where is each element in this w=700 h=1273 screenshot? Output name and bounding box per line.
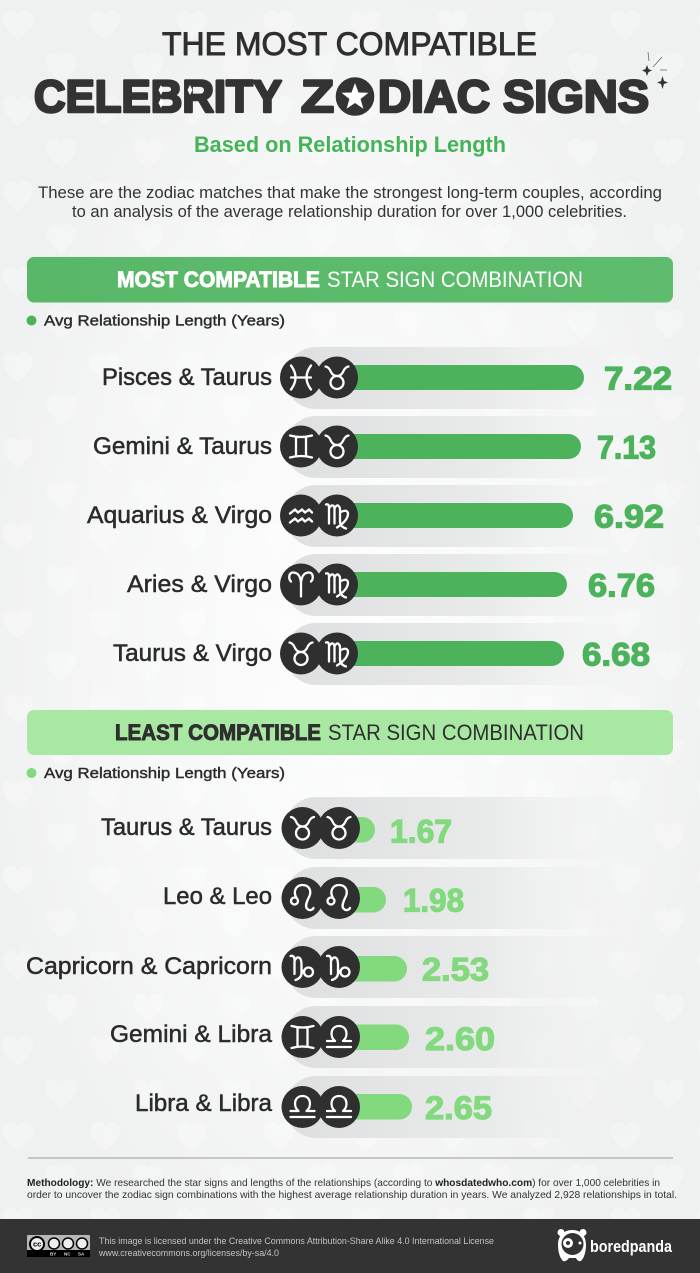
bar row: Gemini & Taurus 7.13: 7.13	[597, 430, 656, 466]
bar row: Aquarius & Virgo 6.92	[87, 485, 664, 547]
title: the most compatible: THE MOST COMPATIBLE	[162, 26, 537, 62]
intro text: These are the zodiac matches that make the strongest long-term couples, according	[38, 184, 662, 202]
bar row: Libra & Libra 2.65	[135, 1076, 650, 1138]
bar row: Taurus & Virgo 6.68: 6.68	[582, 636, 650, 672]
title: celebrity zodiac signs: DIAC	[378, 71, 490, 122]
bar row: Libra & Libra 2.65: 2.65	[425, 1090, 492, 1126]
bar row: Leo & Leo 1.98	[163, 867, 650, 929]
bar row: Aquarius & Virgo 6.92: Aquarius & Virgo	[87, 502, 272, 529]
bar row: Aries & Virgo 6.76: 6.76	[588, 568, 655, 604]
bar row: Gemini & Libra 2.60	[110, 1006, 650, 1068]
icon: sparkles	[642, 52, 668, 89]
license text: This image is licensed under the Creative Commons Attribution-Share Alike 4.0 International License	[99, 1236, 494, 1246]
license text: www.creativecommons.org/licenses/by-sa/4.0	[98, 1248, 279, 1258]
logo: bored panda: boredpanda	[590, 1237, 672, 1256]
panel: most compatible banner	[27, 257, 673, 302]
title: celebrity zodiac signs: CELEBRITY	[34, 71, 282, 122]
icon: creative commons badge: BY	[50, 1252, 56, 1256]
legend: least compatible: Avg Relationship Length (Years)	[44, 765, 285, 782]
icon: creative commons badge	[27, 1235, 90, 1257]
panel: least compatible banner: STAR SIGN COMBINATION	[328, 720, 584, 745]
subtitle: Based on Relationship Length	[194, 132, 506, 157]
bar row: Aries & Virgo 6.76	[127, 554, 655, 616]
legend: most compatible: Avg Relationship Length (Years)	[44, 312, 285, 330]
title: celebrity zodiac signs: SIGNS	[503, 71, 649, 122]
icon: creative commons badge: SA	[78, 1252, 85, 1256]
bar row: Taurus & Virgo 6.68: Taurus & Virgo	[113, 640, 272, 667]
bar row: Gemini & Libra 2.60: Gemini & Libra	[110, 1021, 273, 1048]
bar row: Aries & Virgo 6.76: Aries & Virgo	[127, 571, 272, 598]
bar row: Libra & Libra 2.65: Libra & Libra	[135, 1090, 273, 1117]
bar row: Taurus & Virgo 6.68	[113, 623, 650, 685]
license text	[98, 1236, 494, 1258]
methodology text: Methodology: We researched the star signs and lengths of the relationships (according to whosdatedwho.com) for over 1,000 celebrities in	[27, 1177, 660, 1189]
bar row: Pisces & Taurus 7.22	[102, 347, 672, 409]
panel: least compatible banner	[27, 710, 673, 755]
panel: least compatible banner: LEAST COMPATIBLE	[115, 720, 321, 745]
bar row: Aquarius & Virgo 6.92: 6.92	[594, 498, 664, 534]
title: celebrity zodiac signs	[34, 71, 649, 122]
bar row: Leo & Leo 1.98: 1.98	[403, 882, 464, 918]
bar row: Capricorn & Capricorn 2.53: Capricorn & Capricorn	[26, 953, 272, 980]
intro text: to an analysis of the average relationship duration for over 1,000 celebrities.	[72, 203, 627, 221]
bar row: Capricorn & Capricorn 2.53: 2.53	[422, 952, 489, 988]
bar row: Gemini & Taurus 7.13	[93, 416, 656, 478]
bar row: Pisces & Taurus 7.22: Pisces & Taurus	[102, 364, 272, 391]
bar row: Taurus & Taurus 1.67	[101, 797, 650, 859]
footer bar	[0, 1219, 700, 1273]
logo: bored panda	[558, 1229, 672, 1261]
bar row: Leo & Leo 1.98: Leo & Leo	[163, 883, 272, 910]
bar row: Gemini & Libra 2.60: 2.60	[425, 1021, 495, 1057]
bar row: Taurus & Taurus 1.67: 1.67	[390, 814, 452, 850]
icon: creative commons badge: cc	[33, 1240, 41, 1248]
title: celebrity zodiac signs: O	[338, 71, 372, 122]
panel: most compatible banner: STAR SIGN COMBINATION	[327, 267, 583, 292]
bar row: Capricorn & Capricorn 2.53	[26, 936, 650, 998]
bar row: Pisces & Taurus 7.22: 7.22	[604, 360, 672, 396]
title: celebrity zodiac signs: Z	[301, 71, 334, 122]
bar row: Gemini & Taurus 7.13: Gemini & Taurus	[93, 433, 272, 460]
methodology text: order to uncover the zodiac sign combinations with the highest average relationship duration in years. We analyzed 2,928 relationships in total.	[27, 1189, 677, 1201]
methodology text	[27, 1177, 677, 1201]
intro text	[38, 184, 662, 221]
bar row: Taurus & Taurus 1.67: Taurus & Taurus	[101, 814, 272, 841]
panel: most compatible banner: MOST COMPATIBLE	[117, 267, 320, 292]
icon: creative commons badge: NC	[64, 1252, 71, 1256]
